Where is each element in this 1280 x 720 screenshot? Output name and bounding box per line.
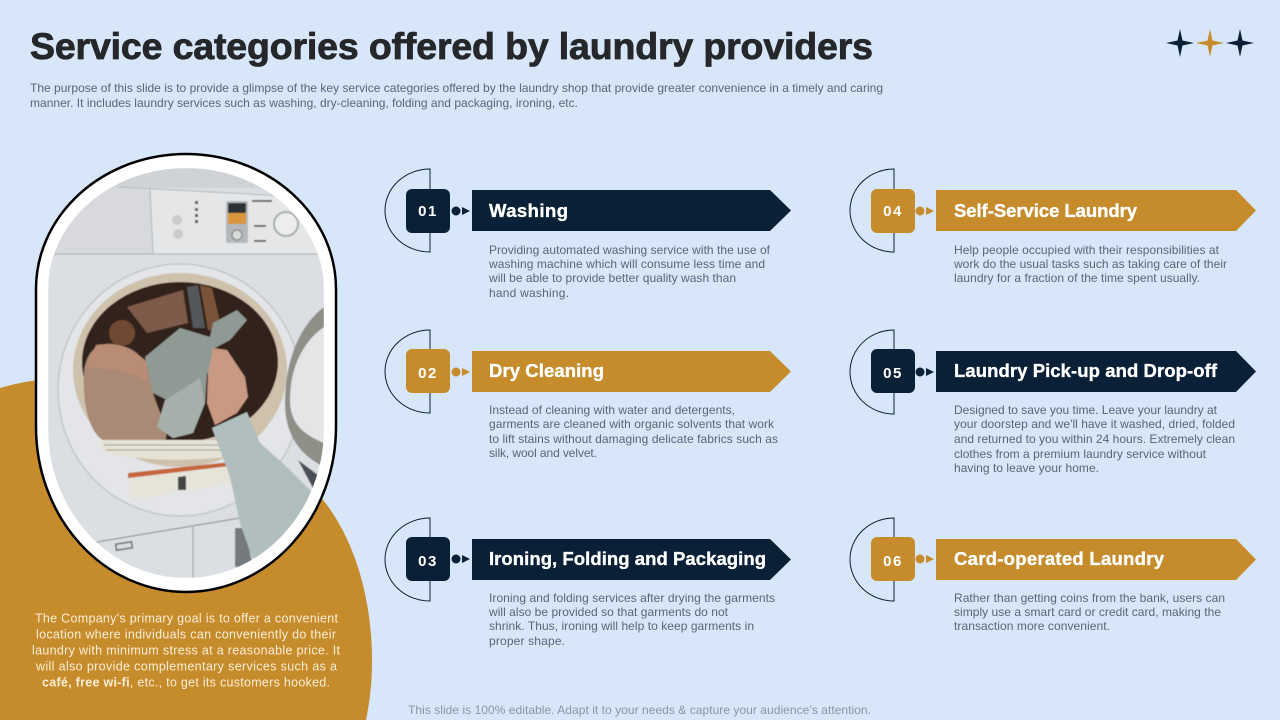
card 06: Card-operated Laundry: 06 (883, 553, 903, 570)
left panel text (32, 612, 341, 690)
card 03: Ironing, Folding and Packaging: shrink. Thus, ironing will help to keep garments in (489, 619, 754, 633)
card 01: Washing: Washing (489, 200, 568, 221)
card 03: Ironing, Folding and Packaging: Ironing, Folding and Packaging (489, 548, 766, 569)
card 04: Self-Service Laundry: Help people occupied with their responsibilities at (954, 243, 1220, 257)
left panel text: The Company's primary goal is to offer a convenient (35, 612, 339, 626)
card 03: Ironing, Folding and Packaging: will also be provided so that garments do not (488, 605, 729, 619)
card 02: Dry Cleaning: 02 (418, 365, 438, 382)
card 04: Self-Service Laundry: Self-Service Laundry (954, 200, 1138, 221)
card 05: Laundry Pick-up and Drop-off: Laundry Pick-up and Drop-off (954, 360, 1218, 381)
card 05: Laundry Pick-up and Drop-off (850, 330, 1256, 475)
card 05: Laundry Pick-up and Drop-off: and returned to you within 24 hours. Extremely clean (954, 432, 1235, 446)
left panel text: café, free wi-fi, etc., to get its customers hooked. (42, 676, 330, 690)
card 02: Dry Cleaning: silk, wool and velvet. (489, 446, 597, 460)
card 05: Laundry Pick-up and Drop-off: clothes from a premium laundry service without (954, 447, 1207, 461)
card 01: Washing: 01 (418, 203, 438, 220)
left panel text: laundry with minimum stress at a reasonable price. It (32, 644, 341, 658)
subtitle: manner. It includes laundry services such as washing, dry-cleaning, folding and packaging, ironing, etc. (30, 96, 578, 110)
card 05: Laundry Pick-up and Drop-off: 05 (883, 365, 903, 382)
card 06: Card-operated Laundry (850, 518, 1256, 633)
card 04: Self-Service Laundry: laundry for a fraction of the time spent usually. (954, 271, 1200, 285)
card 01: Washing: washing machine which will consume less time and (488, 257, 765, 271)
card 03: Ironing, Folding and Packaging: 03 (418, 553, 438, 570)
card 02: Dry Cleaning (385, 330, 791, 460)
card 01: Washing: hand washing. (489, 286, 569, 300)
subtitle (30, 81, 883, 110)
photo: washing machine (48, 168, 324, 580)
card 04: Self-Service Laundry: 04 (883, 203, 903, 220)
card 04: Self-Service Laundry: work do the usual tasks such as taking care of their (953, 257, 1227, 271)
card 02: Dry Cleaning: to lift stains without damaging delicate fabrics such as (489, 432, 778, 446)
card 01: Washing (385, 169, 791, 300)
card 06: Card-operated Laundry: Rather than getting coins from the bank, users can (954, 591, 1225, 605)
card 05: Laundry Pick-up and Drop-off: having to leave your home. (954, 461, 1099, 475)
card 06: Card-operated Laundry: transaction more convenient. (954, 619, 1110, 633)
card 03: Ironing, Folding and Packaging (385, 518, 791, 648)
card 02: Dry Cleaning: garments are cleaned with organic solvents that work (489, 417, 775, 431)
card 03: Ironing, Folding and Packaging: Ironing and folding services after drying the garments (489, 591, 775, 605)
left panel text: location where individuals can conveniently do their (36, 628, 336, 642)
left panel text: will also provide complementary services such as a (35, 660, 337, 674)
panel: orange background shape (0, 378, 372, 720)
card 02: Dry Cleaning: Instead of cleaning with water and detergents, (489, 403, 735, 417)
card 06: Card-operated Laundry: Card-operated Laundry (954, 548, 1165, 569)
icon: three stars (1166, 29, 1254, 57)
card 02: Dry Cleaning: Dry Cleaning (489, 360, 604, 381)
footer note: This slide is 100% editable. Adapt it to your needs & capture your audience’s attention. (408, 703, 871, 717)
title: Service categories offered by laundry providers (30, 25, 873, 67)
card 05: Laundry Pick-up and Drop-off: Designed to save you time. Leave your laundry at (954, 403, 1218, 417)
card 03: Ironing, Folding and Packaging: proper shape. (489, 634, 565, 648)
card 01: Washing: Providing automated washing service with the use of (489, 243, 771, 257)
card 06: Card-operated Laundry: simply use a smart card or credit card, making the (954, 605, 1221, 619)
card 01: Washing: will be able to provide better quality wash than (488, 271, 736, 285)
photo frame (36, 154, 336, 592)
card 04: Self-Service Laundry (850, 169, 1256, 285)
subtitle: The purpose of this slide is to provide a glimpse of the key service categories offered by the laundry shop that provide greater convenience in a timely and caring (30, 81, 883, 95)
card 05: Laundry Pick-up and Drop-off: your doorstep and we'll have it washed, dried, folded (954, 417, 1235, 431)
